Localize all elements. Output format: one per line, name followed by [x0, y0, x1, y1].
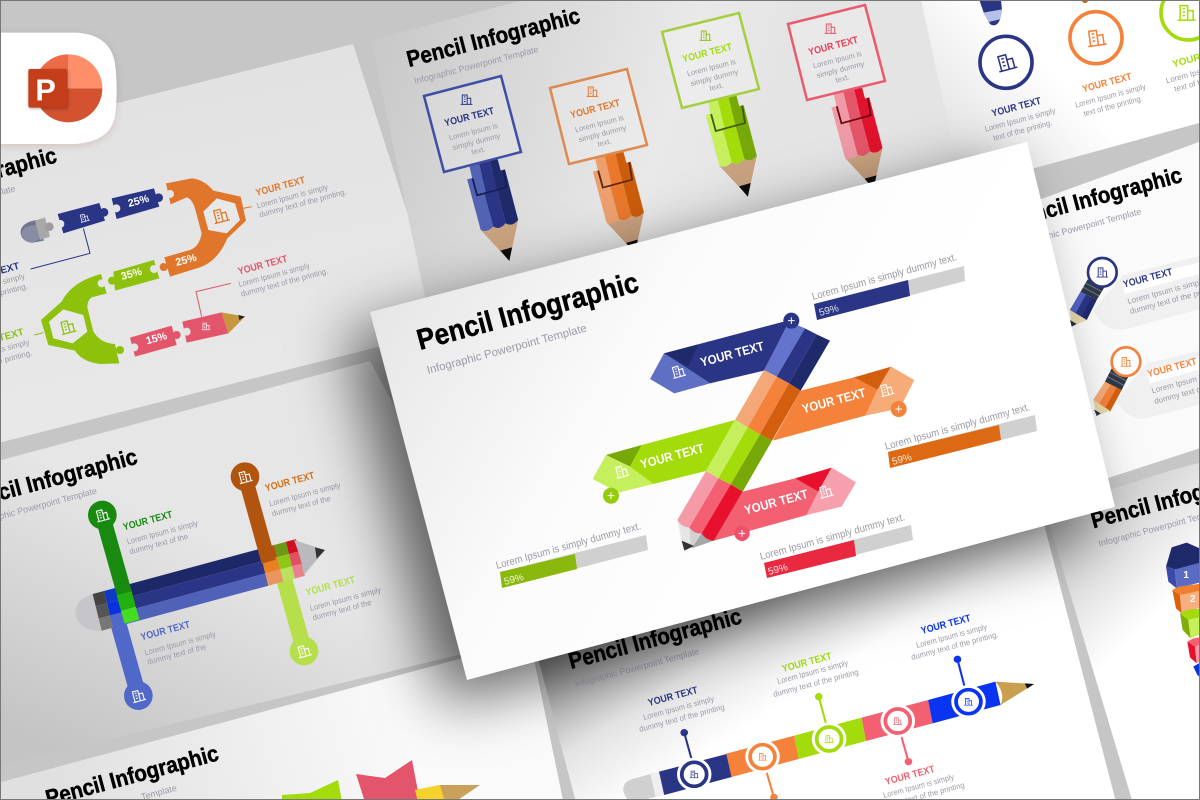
vertical strip orange [231, 462, 269, 562]
node blue [951, 685, 986, 718]
icon circle green [1161, 0, 1200, 40]
panel: stacked pencil slide [1045, 460, 1200, 800]
strip row navy [1070, 255, 1200, 330]
connector lines [31, 207, 252, 335]
pencil arrows chart [593, 313, 914, 551]
label: red callout: YOUR TEXT [237, 254, 289, 278]
label green: Lorem Ipsum is simply [126, 519, 199, 546]
label: red callout [237, 254, 329, 299]
slide subtitle: strips: Infographic Powerpoint Template [1016, 206, 1142, 249]
pencil body [93, 539, 305, 631]
arrow orange: YOUR TEXT [800, 386, 867, 416]
main subtitle: Infographic Powerpoint Template [426, 323, 588, 377]
green shape [282, 780, 342, 800]
panel: pencils with text strips [950, 138, 1200, 500]
puzzle piece green 35 percent: 35% [120, 266, 144, 283]
panel: bottom left slide [0, 640, 565, 800]
label blue [140, 619, 217, 667]
node navy [677, 758, 711, 791]
label: orange callout: YOUR TEXT [255, 175, 306, 199]
timeline label blue: Lorem Ipsum is simply [915, 622, 988, 650]
label light green [305, 575, 382, 622]
label: navy callout [0, 261, 29, 315]
timeline label navy: YOUR TEXT [647, 685, 699, 709]
pencil card orange [550, 69, 647, 253]
label orange [1074, 71, 1147, 118]
pencil card orange: text. [596, 136, 612, 149]
puzzle piece red 15 percent: 15% [145, 330, 169, 347]
puzzle piece red pencil tip [182, 312, 245, 343]
progress bar orange: 59% [891, 452, 913, 468]
progress bar navy: 59% [818, 303, 840, 319]
slide subtitle: four pencils: Infographic Powerpoint Template [413, 44, 539, 86]
eraser [75, 594, 102, 631]
pencil tip [294, 540, 325, 575]
pencil card orange: simply dummy [578, 123, 627, 144]
progress bar green [495, 520, 648, 588]
puzzle piece red 15 percent [130, 326, 181, 357]
pencil card red [788, 5, 885, 189]
node red [881, 704, 915, 738]
progress bar red: Lorem Ipsum is simply dummy text. [759, 511, 906, 563]
label orange: Lorem Ipsum is simply [268, 481, 341, 508]
timeline label navy: dummy text of the printing [638, 702, 726, 734]
pencil card navy: text. [470, 144, 486, 157]
pencil card orange: YOUR TEXT [569, 98, 621, 121]
arrow green: YOUR TEXT [639, 441, 706, 472]
orange stub dot [1082, 0, 1088, 3]
node green [812, 722, 846, 756]
arrow green [593, 420, 735, 504]
panel: main pencil infographic slide [370, 142, 1115, 680]
puzzle piece green 35 percent [108, 260, 159, 291]
puzzle piece navy icon [56, 203, 108, 233]
puzzle pencil chart [0, 175, 347, 381]
node orange [745, 740, 780, 773]
label light green: YOUR TEXT [305, 575, 356, 599]
diagonal pencil [677, 322, 830, 551]
plus button navy [783, 313, 799, 329]
label: orange callout: Lorem Ipsum is simply [256, 183, 329, 210]
pencil card green: Lorem Ipsum is [686, 57, 737, 78]
timeline label navy: Lorem Ipsum is simply [642, 694, 715, 722]
arrow red: YOUR TEXT [743, 487, 810, 518]
panel: puzzle pencil slide [0, 44, 445, 445]
pencil card green: simply dummy [690, 67, 739, 88]
badge: PowerPoint logo: P [35, 74, 56, 108]
timeline label green: YOUR TEXT [781, 651, 833, 675]
label green: dummy text of the [128, 532, 190, 556]
label navy [984, 96, 1056, 143]
stacked pencil column [1166, 543, 1200, 680]
label green [122, 509, 199, 556]
main title: Pencil Infographic [414, 267, 642, 357]
timeline label green: dummy text of the printing [772, 667, 860, 699]
vertical strip blue [115, 612, 153, 710]
red shape with pencil tip [356, 760, 480, 800]
label navy: text of the printing. [992, 118, 1053, 143]
vertical strip light green [282, 570, 318, 665]
orange hexagon wrench [160, 178, 246, 277]
progress bar navy [811, 251, 965, 320]
pencil card navy: Lorem Ipsum is [448, 121, 499, 142]
progress bar orange: Lorem Ipsum is simply dummy text. [884, 401, 1031, 453]
label green [1165, 45, 1200, 94]
slide title: timeline: Pencil Infographic [566, 604, 744, 674]
label blue: dummy text of the [146, 642, 208, 667]
pencil card red: Lorem Ipsum is [812, 49, 863, 70]
strip row orange [1093, 347, 1200, 419]
pencil card navy: YOUR TEXT [443, 106, 495, 129]
arrow navy [650, 320, 790, 393]
progress bar navy: Lorem Ipsum is simply dummy text. [811, 251, 958, 303]
pencil stub navy [979, 0, 1002, 25]
pencil card orange: Lorem Ipsum is [574, 113, 625, 134]
timeline label blue: YOUR TEXT [920, 613, 972, 637]
stacked pencil column: 2 [1190, 594, 1196, 605]
pencil card red: text. [834, 72, 850, 85]
label navy: YOUR TEXT [991, 96, 1042, 120]
puzzle piece navy 25 percent [112, 188, 163, 219]
label green: YOUR TEXT [122, 509, 174, 533]
label orange: dummy text of the [271, 494, 332, 518]
icon circle navy [980, 36, 1032, 88]
label: orange callout [255, 175, 347, 219]
timeline label red: Lorem Ipsum is simply [882, 772, 955, 800]
label blue: YOUR TEXT [140, 619, 191, 643]
progress bar green: 59% [503, 572, 525, 588]
timeline label red: YOUR TEXT [884, 764, 936, 788]
label orange: text of the printing. [1083, 94, 1143, 118]
label orange: YOUR TEXT [264, 470, 316, 494]
icon circle orange [1070, 12, 1122, 64]
badge: PowerPoint logo [0, 33, 117, 144]
timeline stem lines [680, 656, 965, 800]
timeline pencil body [623, 682, 1034, 800]
strip row navy: YOUR TEXT [1122, 267, 1174, 291]
arrow orange [773, 367, 914, 441]
pencil card red: YOUR TEXT [807, 35, 859, 58]
panel: horizontal pencil with crossing strips [0, 361, 520, 768]
pencil card navy [424, 76, 521, 261]
timeline label green [772, 651, 860, 699]
slide title: strips: Pencil Infographic [1006, 161, 1185, 233]
pencil card navy: simply dummy [452, 131, 501, 152]
label orange: Lorem Ipsum is simply [1074, 82, 1147, 110]
timeline label blue [910, 613, 999, 662]
panel: four pencils with cards [371, 0, 968, 330]
eraser piece [21, 217, 54, 243]
green hexagon wrench [41, 274, 124, 364]
pencil card green: YOUR TEXT [681, 42, 733, 65]
progress bar red: 59% [767, 562, 789, 578]
pencil card green: text. [708, 80, 724, 93]
label light green: dummy text of the [312, 598, 373, 622]
slide subtitle: timeline: Infographic Powerpoint Template [574, 646, 700, 689]
timeline label navy [638, 685, 726, 734]
pencil card red: simply dummy [816, 59, 865, 80]
label light green: Lorem Ipsum is simply [309, 585, 382, 613]
label orange [264, 470, 341, 518]
progress bar green: Lorem Ipsum is simply dummy text. [495, 520, 642, 572]
label: red callout: dummy text of the printing. [240, 267, 329, 299]
orange hexagon wrench: 25% [174, 252, 199, 269]
panel: circle icons slide [920, 0, 1200, 188]
label: green callout [0, 327, 33, 381]
label orange: YOUR TEXT [1081, 71, 1133, 95]
label: orange callout: dummy text of the printing. [258, 187, 347, 219]
slide title: four pencils: Pencil Infographic [404, 3, 583, 72]
pencil card green [662, 13, 759, 197]
puzzle piece navy 25 percent: 25% [127, 193, 151, 210]
vertical strip green [88, 501, 132, 622]
plus button red [734, 526, 750, 541]
timeline label green: Lorem Ipsum is simply [776, 658, 849, 686]
label: red callout: Lorem Ipsum is simply [238, 261, 311, 289]
panel: timeline pencil slide [520, 470, 1118, 800]
arrow red [714, 468, 856, 541]
label blue: Lorem Ipsum is simply [144, 630, 217, 657]
label navy: Lorem Ipsum is simply [984, 106, 1056, 134]
timeline label blue: dummy text of the printing. [910, 630, 999, 662]
stacked pencil column: 1 [1183, 570, 1189, 581]
arrow navy: YOUR TEXT [699, 339, 766, 370]
